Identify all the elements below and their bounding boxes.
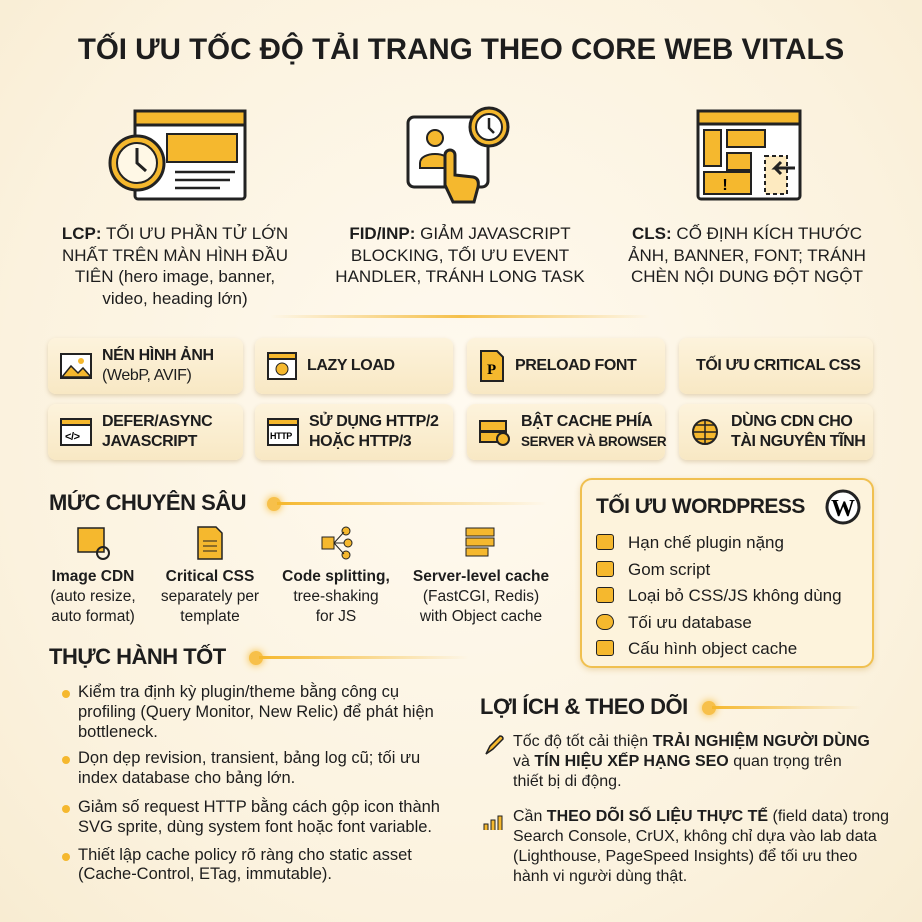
- list: benefits: thiết bị di động.: [513, 773, 622, 790]
- item: critical css: template: [180, 608, 240, 625]
- heading: mức chuyên sâu: MỨC CHUYÊN SÂU: [49, 490, 246, 515]
- text: LCP: video, heading lớn): [102, 288, 248, 308]
- card: cache: SERVER VÀ BROWSER: [521, 434, 666, 449]
- list: benefits: Cần THEO DÕI SỐ LIỆU THỰC TẾ (field data) trong: [513, 808, 889, 825]
- card: nén hình ảnh: [48, 338, 243, 394]
- heading: lợi ích: [480, 694, 855, 720]
- card: defer: DEFER/ASYNC: [102, 413, 212, 430]
- icon: FID: [406, 106, 510, 204]
- heading: thực hành tốt: THỰC HÀNH TỐT: [49, 644, 226, 669]
- item: image cdn: auto format): [51, 608, 135, 625]
- item: critical css: Critical CSS: [166, 568, 254, 585]
- card: http2: SỬ DỤNG HTTP/2: [309, 413, 438, 430]
- list: best practices: profiling (Query Monitor, New Relic) để phát hiện: [78, 703, 434, 721]
- item: image cdn: (auto resize,: [50, 588, 136, 605]
- card: defer: [48, 404, 243, 460]
- list: Cấu hình object cache: [628, 639, 797, 658]
- list: [596, 533, 842, 658]
- text: FID/INP: BLOCKING, TỐI ƯU EVENT: [351, 246, 569, 264]
- icon: CLS: !: [722, 177, 728, 194]
- text: CLS: [628, 224, 866, 286]
- card: cdn: TÀI NGUYÊN TĨNH: [731, 433, 865, 450]
- card: lazy load: LAZY LOAD: [307, 357, 395, 374]
- heading: thực hành tốt: [49, 644, 460, 670]
- item: image cdn: [50, 527, 136, 625]
- list: best practices: SVG sprite, dùng system font hoặc font variable.: [78, 818, 432, 836]
- card: critical css: [679, 338, 873, 394]
- list: best practices: (Cache-Control, ETag, immutable).: [78, 865, 332, 883]
- card: defer: </>: [65, 431, 80, 443]
- text: LCP: [62, 224, 288, 308]
- list: Loại bỏ CSS/JS không dùng: [628, 586, 842, 605]
- list: benefits: Tốc độ tốt cải thiện TRẢI NGHIỆM NGƯỜI DÙNG: [513, 733, 870, 750]
- text: FID/INP: FID/INP: GIẢM JAVASCRIPT: [349, 224, 571, 243]
- item: code splitting: [282, 526, 390, 625]
- card: http2: [255, 404, 453, 460]
- list: best practices: index database cho bảng lớn.: [78, 769, 295, 787]
- card: http2: HTTP: [270, 431, 292, 441]
- connector: [270, 315, 650, 318]
- item: code splitting: for JS: [316, 608, 356, 625]
- heading: mức chuyên sâu: [49, 490, 536, 517]
- list: Tối ưu database: [628, 612, 752, 632]
- list: Hạn chế plugin nặng: [628, 533, 784, 552]
- heading: wordpress: TỐI ƯU WORDPRESS: [596, 495, 805, 518]
- text: LCP: NHẤT TRÊN MÀN HÌNH ĐẦU: [62, 246, 288, 264]
- item: server cache: (FastCGI, Redis): [423, 588, 539, 605]
- list: best practices: [62, 682, 440, 883]
- card: critical css: TỐI ƯU CRITICAL CSS: [696, 357, 860, 374]
- item: code splitting: Code splitting,: [282, 568, 390, 585]
- item: critical css: [161, 526, 259, 625]
- list: best practices: bottleneck.: [78, 723, 158, 741]
- item: server cache: with Object cache: [420, 608, 542, 625]
- advanced items: [50, 526, 549, 625]
- card: preload font: P: [487, 362, 496, 378]
- list: benefits: (Lighthouse, PageSpeed Insights) để tối ưu theo: [513, 848, 857, 865]
- icon: LCP: [108, 110, 246, 200]
- card: preload font: [467, 338, 665, 394]
- list: Gom script: [628, 560, 710, 578]
- card: http2: HOẶC HTTP/3: [309, 433, 411, 450]
- list: best practices: Thiết lập cache policy rõ ràng cho static asset: [78, 846, 412, 864]
- list: benefits: Search Console, CrUX, không chỉ dựa vào lab data: [513, 828, 877, 845]
- card: defer: JAVASCRIPT: [102, 433, 197, 450]
- text: LCP: TIÊN (hero image, banner,: [75, 267, 275, 286]
- icon: rocket: [485, 735, 504, 755]
- icon: wp: [826, 490, 860, 524]
- card: lazy load: [255, 338, 453, 394]
- list: best practices: Kiểm tra định kỳ plugin/theme bằng công cụ: [78, 683, 399, 701]
- item: server cache: [413, 528, 549, 625]
- text: FID/INP: [335, 224, 585, 286]
- card: nén hình ảnh: (WebP, AVIF): [102, 367, 191, 384]
- icon: wp: W: [831, 496, 855, 522]
- list: benefits: [484, 732, 889, 885]
- card: nén hình ảnh: NÉN HÌNH ẢNH: [102, 347, 214, 364]
- list: benefits: và TÍN HIỆU XẾP HẠNG SEO quan trọng trên: [513, 753, 842, 770]
- item: code splitting: tree-shaking: [293, 588, 379, 605]
- item: server cache: Server-level cache: [413, 568, 549, 585]
- panel: wordpress: [580, 478, 874, 668]
- text: LCP: LCP: TỐI ƯU PHẦN TỬ LỚN: [62, 224, 288, 243]
- card: cdn: [679, 404, 873, 460]
- card: cdn: DÙNG CDN CHO: [731, 413, 852, 430]
- card: cache: [467, 404, 665, 460]
- list: best practices: Giảm số request HTTP bằng cách gộp icon thành: [78, 798, 440, 816]
- list: best practices: Dọn dẹp revision, transient, bảng log cũ; tối ưu: [78, 749, 420, 767]
- title: TỐI ƯU TỐC ĐỘ TẢI TRANG THEO CORE WEB VITALS: [78, 33, 844, 66]
- text: CLS: ẢNH, BANNER, FONT; TRÁNH: [628, 246, 866, 264]
- card: cache: BẬT CACHE PHÍA: [521, 413, 652, 430]
- list: benefits: hành vi người dùng thật.: [513, 868, 687, 885]
- item: image cdn: Image CDN: [52, 568, 134, 585]
- icon: chart: [484, 816, 502, 830]
- card: preload font: PRELOAD FONT: [515, 357, 636, 374]
- icon: CLS: [696, 110, 802, 200]
- text: CLS: CHÈN NỘI DUNG ĐỘT NGỘT: [631, 267, 863, 286]
- heading: lợi ích: LỢI ÍCH & THEO DÕI: [480, 694, 688, 719]
- text: FID/INP: HANDLER, TRÁNH LONG TASK: [335, 267, 585, 286]
- text: CLS: CLS: CỐ ĐỊNH KÍCH THƯỚC: [632, 224, 862, 243]
- item: critical css: separately per: [161, 588, 259, 605]
